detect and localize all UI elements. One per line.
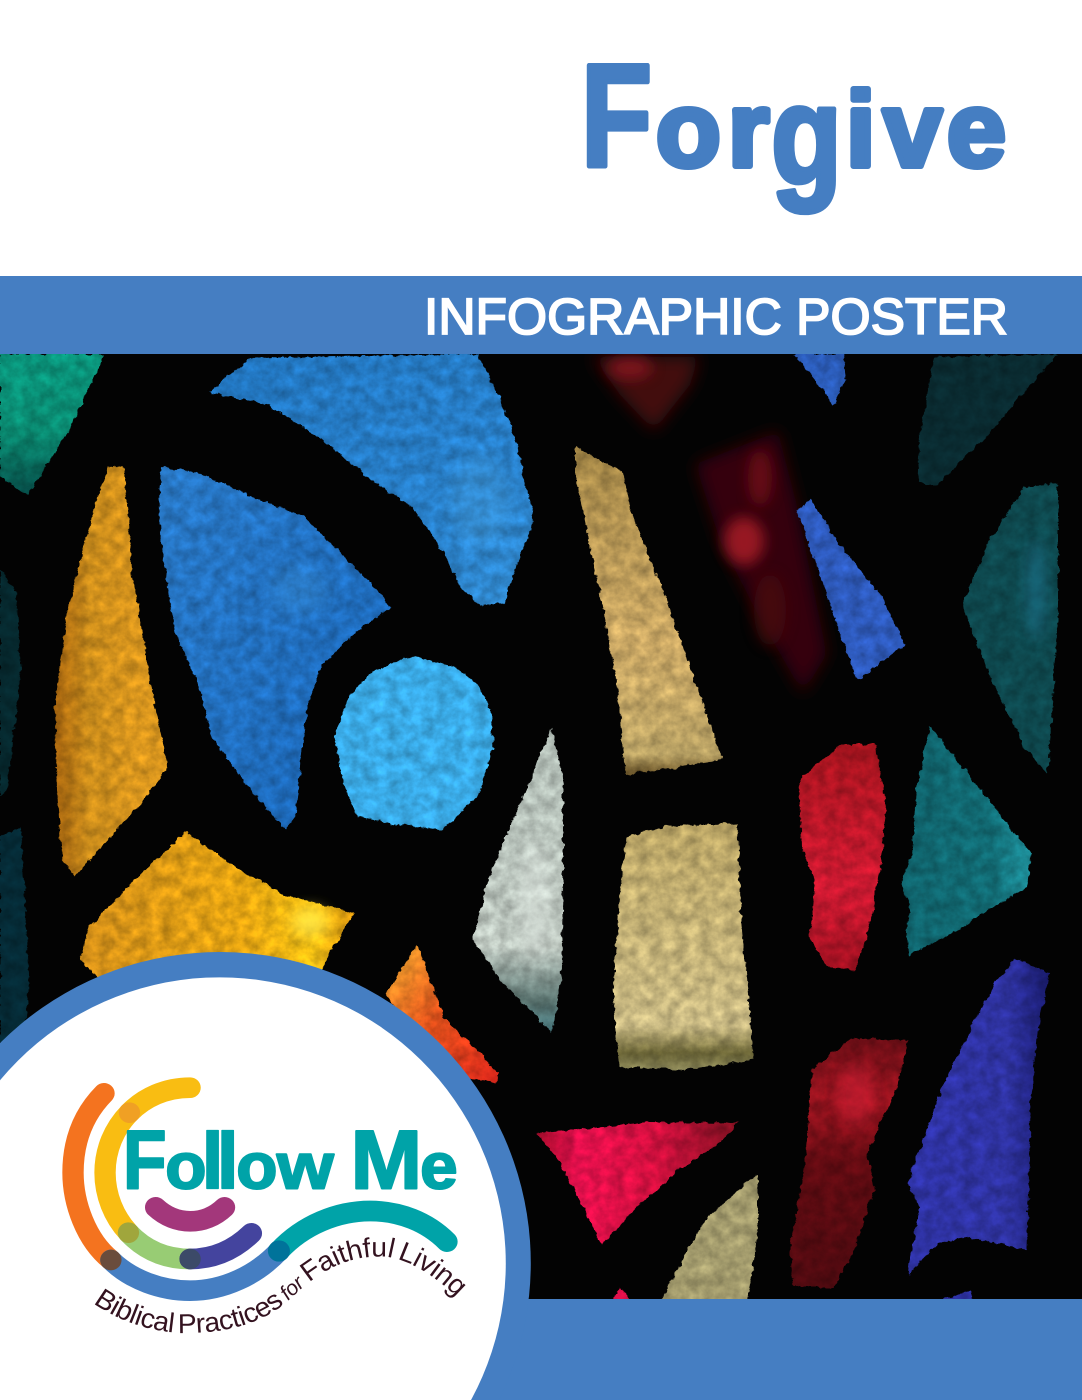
pane: orange red xyxy=(386,945,499,1082)
pane: teal right xyxy=(901,726,1031,955)
title: F xyxy=(581,34,652,197)
title: g xyxy=(771,56,842,213)
pane: large blue top xyxy=(209,354,534,605)
pane: amber left xyxy=(55,465,168,876)
banner: infographic poster xyxy=(0,276,1082,354)
arc: green xyxy=(128,1233,190,1259)
logo wordmark: ll xyxy=(201,1117,239,1206)
pane: dark teal top right xyxy=(918,354,1058,487)
smile: purple xyxy=(156,1207,225,1221)
blurred dim panes xyxy=(592,356,827,694)
pane: dark red centre xyxy=(695,431,827,694)
arc: orange xyxy=(73,1093,111,1260)
arc: indigo xyxy=(190,1233,251,1259)
glass panes xyxy=(0,354,1058,1304)
pane: blue triangular xyxy=(159,467,391,830)
bottom blue band xyxy=(0,1299,1082,1400)
logo tagline: Biblical Practices for Faithful Living xyxy=(94,1237,466,1334)
pane: dark teal left edge xyxy=(0,569,21,797)
logo wordmark: o xyxy=(165,1130,207,1203)
wave: teal xyxy=(279,1211,447,1251)
logo wordmark: F xyxy=(123,1113,167,1206)
pane: dark red bottom xyxy=(790,1037,908,1287)
title: v xyxy=(883,71,942,189)
pane: white xyxy=(473,727,563,1032)
pane: green top left xyxy=(0,354,105,496)
pane: red centre right xyxy=(799,744,886,970)
pane: amber lower xyxy=(80,832,354,980)
title: r xyxy=(728,71,769,189)
logo wordmark: e xyxy=(420,1130,458,1203)
pane: dark blue left edge xyxy=(0,828,29,1045)
title: o xyxy=(656,71,721,189)
title: e xyxy=(947,71,1006,189)
pane: dark red top xyxy=(592,356,699,431)
pane: tan bottom xyxy=(660,1173,758,1304)
pane: indigo xyxy=(908,958,1049,1275)
arc: yellow xyxy=(105,1088,190,1233)
pane: pale tan xyxy=(613,823,754,1070)
pane: small indigo sliver xyxy=(927,1290,973,1304)
banner label: INFOGRAPHIC POSTER xyxy=(424,288,1008,345)
pane: cyan circle xyxy=(334,656,493,830)
overlap dots xyxy=(100,1102,290,1270)
logo badge circle xyxy=(0,952,531,1400)
pane: small blue top xyxy=(794,354,846,406)
wave: blue xyxy=(111,1251,279,1291)
logo wordmark: M xyxy=(351,1113,422,1206)
glass highlights xyxy=(272,357,1046,1125)
pane: small crimson sliver xyxy=(610,1287,632,1304)
pane: tan long xyxy=(576,447,723,774)
pane: blue narrow xyxy=(797,499,905,681)
title: i xyxy=(846,71,875,189)
logo wordmark: o xyxy=(236,1130,277,1203)
logo wordmark: w xyxy=(276,1130,334,1203)
pane: crimson xyxy=(537,1122,738,1245)
logo: Follow Me xyxy=(62,1077,466,1334)
pane: dark teal right xyxy=(962,484,1058,774)
stained glass photograph xyxy=(0,354,1082,1304)
